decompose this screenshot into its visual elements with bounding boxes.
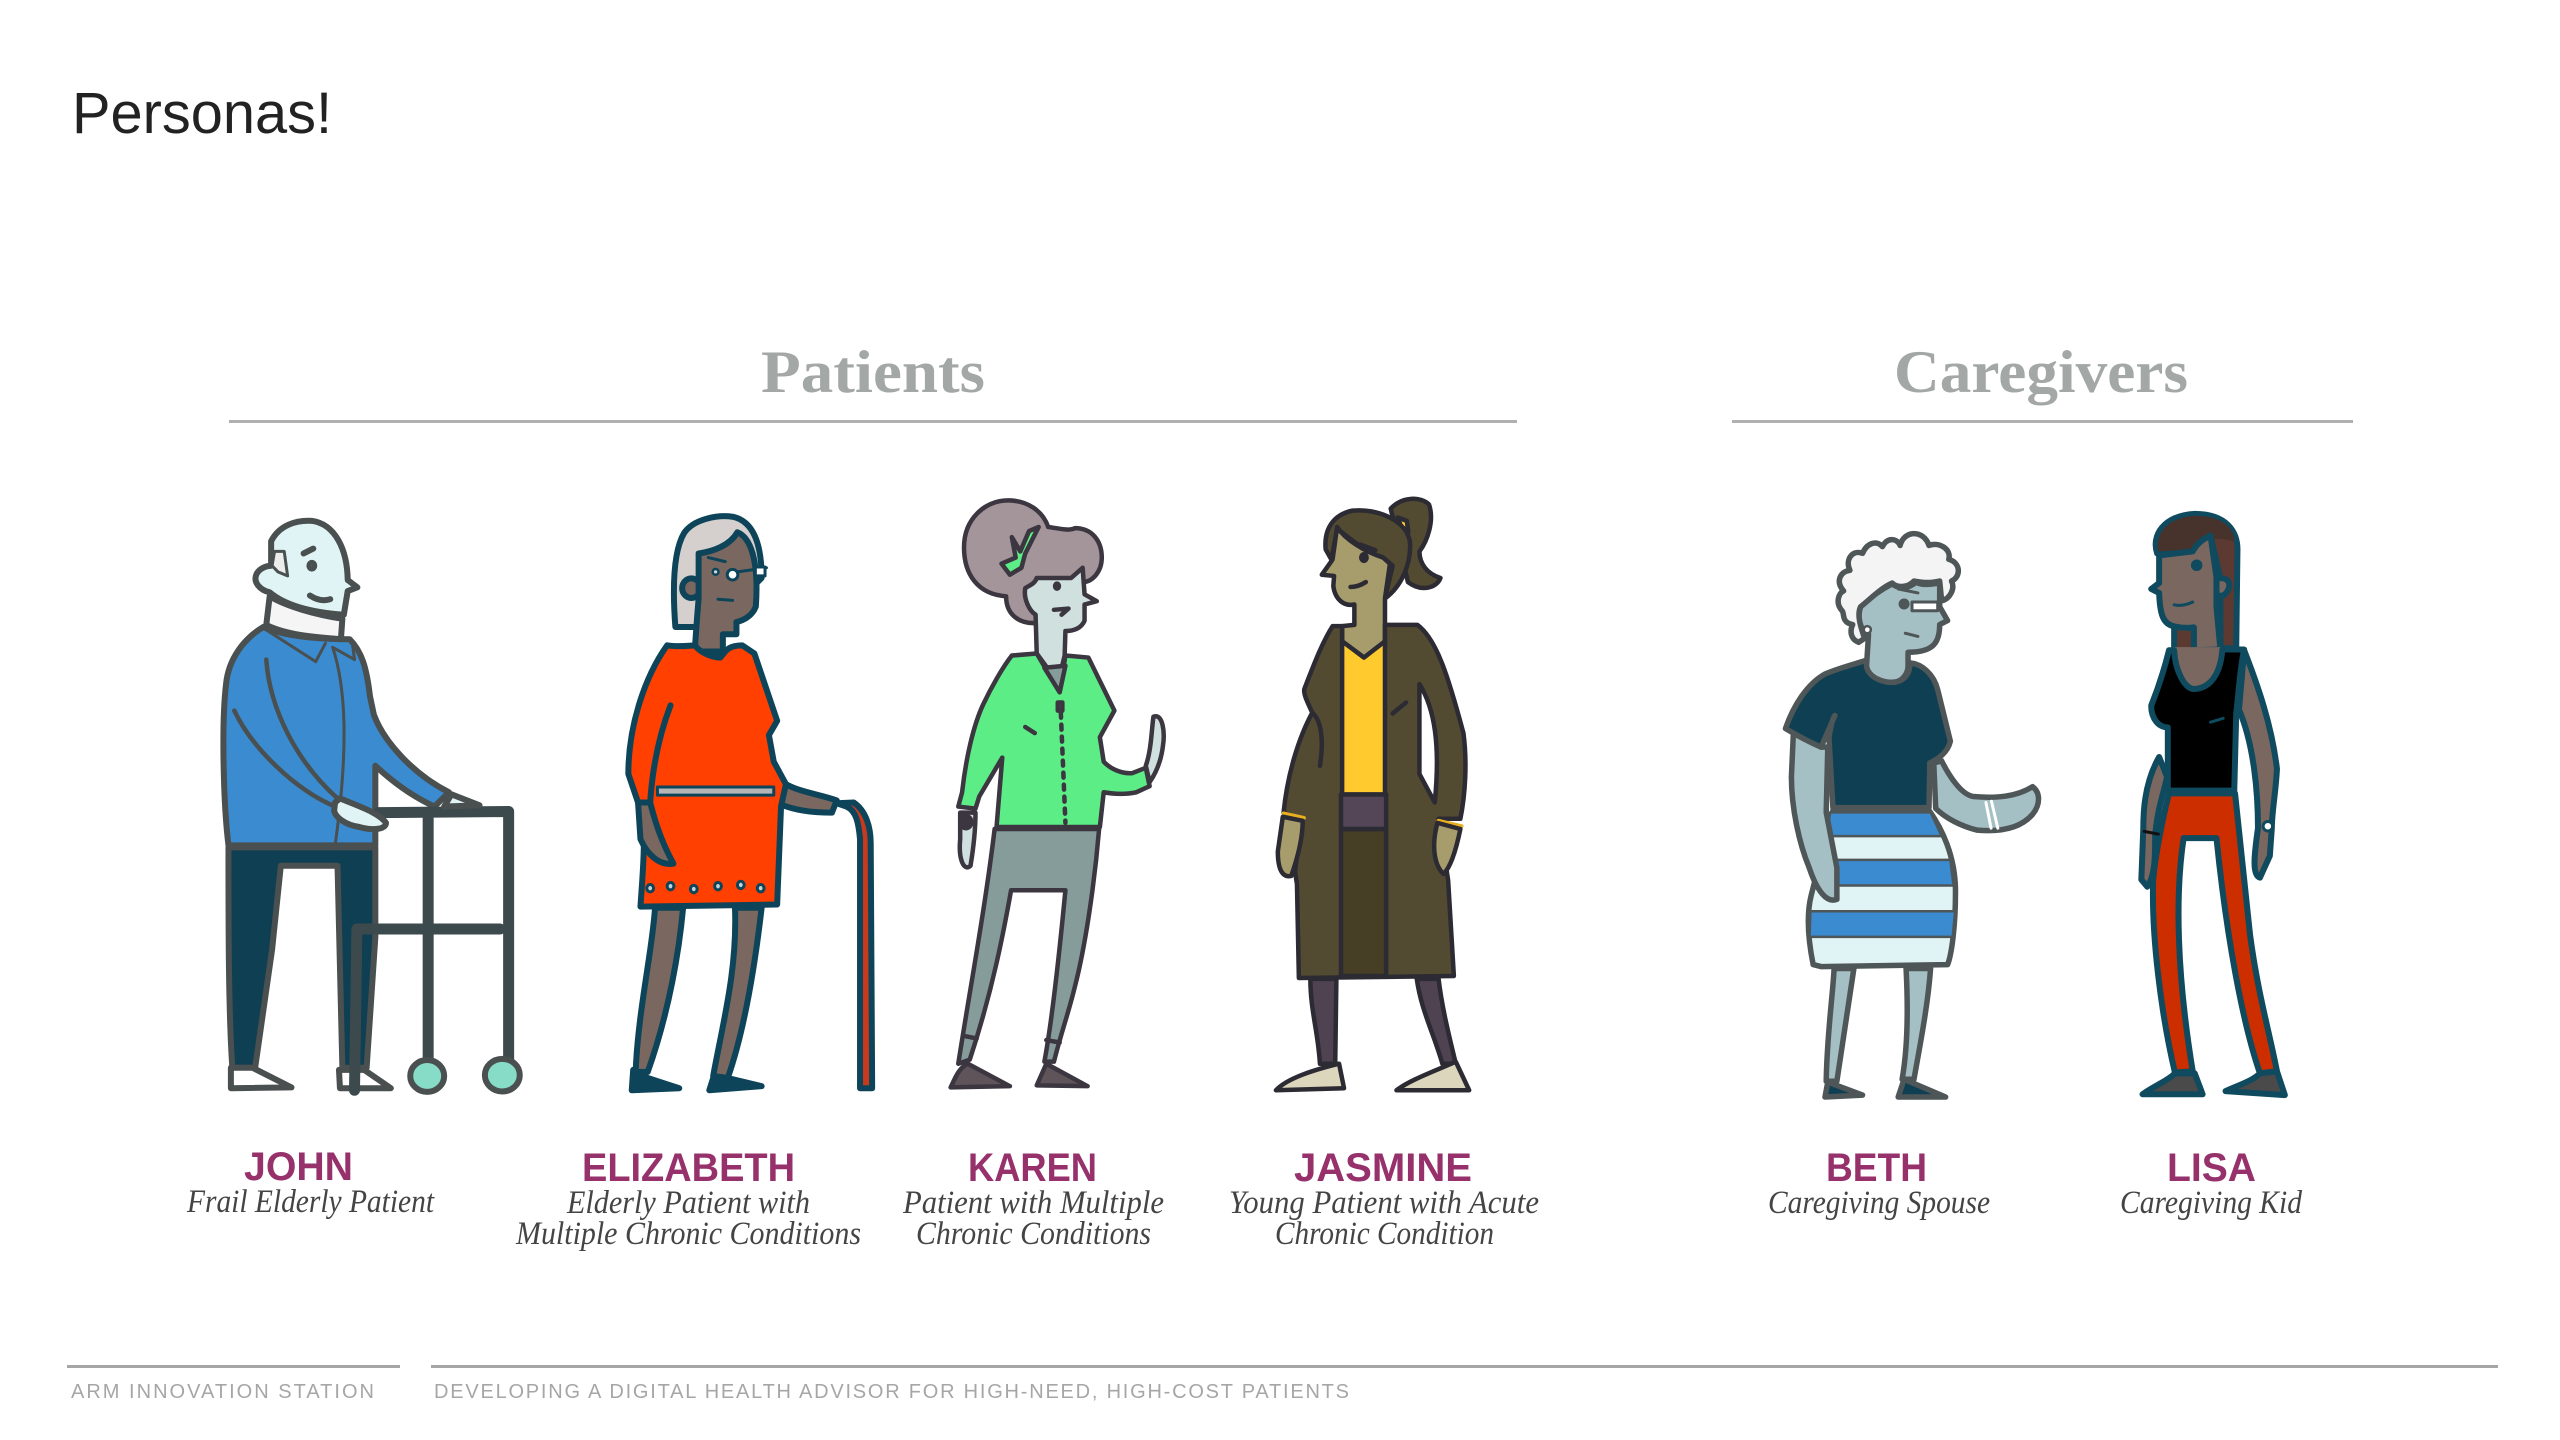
Jasmine shoes [1276, 1062, 1469, 1090]
John wheels [410, 1059, 520, 1092]
Lisa shoes [2143, 1071, 2285, 1095]
Karen face [1025, 568, 1097, 676]
Karen watch [961, 816, 971, 828]
caption: Elizabeth: Multiple Chronic Conditions [515, 1216, 861, 1252]
caption: Karen: Patient with Multiple [902, 1185, 1164, 1221]
Lisa right arm [2239, 650, 2277, 878]
John head [256, 521, 357, 615]
caption: Jasmine: JASMINE [1294, 1146, 1472, 1190]
John shirt [223, 627, 449, 845]
caption: Jasmine: Young Patient with Acute [1229, 1185, 1539, 1221]
figure: Beth [1785, 534, 2039, 1097]
Jasmine cuffs and hands [1278, 813, 1462, 876]
Karen hair [964, 500, 1102, 623]
Jasmine shirt and belt [1341, 641, 1386, 976]
caption: Beth [1768, 1146, 1990, 1221]
Beth t-shirt [1785, 660, 1950, 808]
caption: Karen: Chronic Conditions [916, 1216, 1151, 1252]
John walker [354, 811, 509, 1090]
figure: Jasmine [1276, 499, 1469, 1090]
title: Personas! [72, 81, 332, 146]
caption: John [186, 1145, 435, 1220]
Elizabeth dress [628, 645, 786, 907]
caption: Karen: KAREN [968, 1146, 1097, 1190]
Beth left arm [1791, 733, 1837, 900]
caption: Elizabeth: Elderly Patient with [566, 1185, 810, 1221]
Lisa chest [2173, 647, 2223, 689]
Elizabeth cane [837, 802, 872, 1088]
Jasmine hair [1325, 510, 1410, 598]
heading: patients: Patients [761, 339, 985, 405]
Beth striped skirt [1808, 810, 1955, 967]
Jasmine face [1322, 527, 1390, 658]
Jasmine leggings [1310, 979, 1456, 1064]
Lisa left arm [2141, 757, 2167, 887]
caption: Lisa [2120, 1146, 2302, 1221]
Karen hands [960, 716, 1164, 867]
figure: Karen [951, 500, 1164, 1087]
John collar [266, 596, 342, 639]
caption: Elizabeth [515, 1146, 861, 1252]
Karen hair bow [1002, 527, 1039, 575]
Beth right arm [1934, 761, 2039, 831]
Beth head [1859, 582, 1948, 682]
John shoes [231, 1068, 391, 1088]
Jasmine ponytail [1391, 499, 1440, 588]
figure: John with walker [223, 521, 520, 1092]
Elizabeth face [682, 532, 766, 651]
caption: Beth: BETH [1826, 1146, 1927, 1190]
figure: Lisa [2141, 514, 2285, 1095]
heading: caregivers: Caregivers [1894, 339, 2188, 405]
Elizabeth right arm [781, 784, 837, 813]
caption: Karen [902, 1146, 1164, 1252]
footer: right: DEVELOPING A DIGITAL HEALTH ADVISOR FOR HIGH-NEED, HIGH-COST PATIENTS [434, 1381, 1349, 1403]
Elizabeth hand [638, 802, 673, 864]
Lisa wristband and watch [2144, 821, 2273, 834]
Lisa red trousers [2153, 793, 2277, 1073]
Jasmine coat [1284, 625, 1465, 978]
caption: Jasmine: Chronic Condition [1275, 1216, 1494, 1252]
John hands [334, 794, 480, 829]
caption: Lisa: LISA [2167, 1146, 2256, 1190]
Lisa face [2151, 536, 2229, 650]
footer: left: ARM INNOVATION STATION [71, 1381, 374, 1403]
Lisa black top [2151, 649, 2244, 791]
caption: Lisa: Caregiving Kid [2120, 1185, 2302, 1221]
Elizabeth hair [674, 516, 762, 627]
Beth legs [1826, 969, 1931, 1081]
caption: John: Frail Elderly Patient [186, 1184, 435, 1220]
Elizabeth dress dots [647, 881, 764, 893]
Karen cardigan [958, 653, 1150, 827]
John trousers [228, 847, 375, 1068]
Karen trousers [958, 829, 1099, 1064]
caption: Beth: Caregiving Spouse [1768, 1185, 1990, 1221]
caption: Elizabeth: ELIZABETH [582, 1146, 795, 1190]
Elizabeth legs [636, 908, 762, 1078]
Elizabeth shoes [632, 1070, 762, 1090]
caption: Jasmine [1229, 1146, 1539, 1252]
Lisa hair [2156, 514, 2237, 651]
figure: Elizabeth with cane [628, 516, 872, 1090]
caption: John: JOHN [244, 1145, 353, 1189]
Beth shoes [1825, 1079, 1946, 1097]
Beth curly hair [1838, 534, 1958, 642]
Karen shoes [951, 1064, 1088, 1087]
